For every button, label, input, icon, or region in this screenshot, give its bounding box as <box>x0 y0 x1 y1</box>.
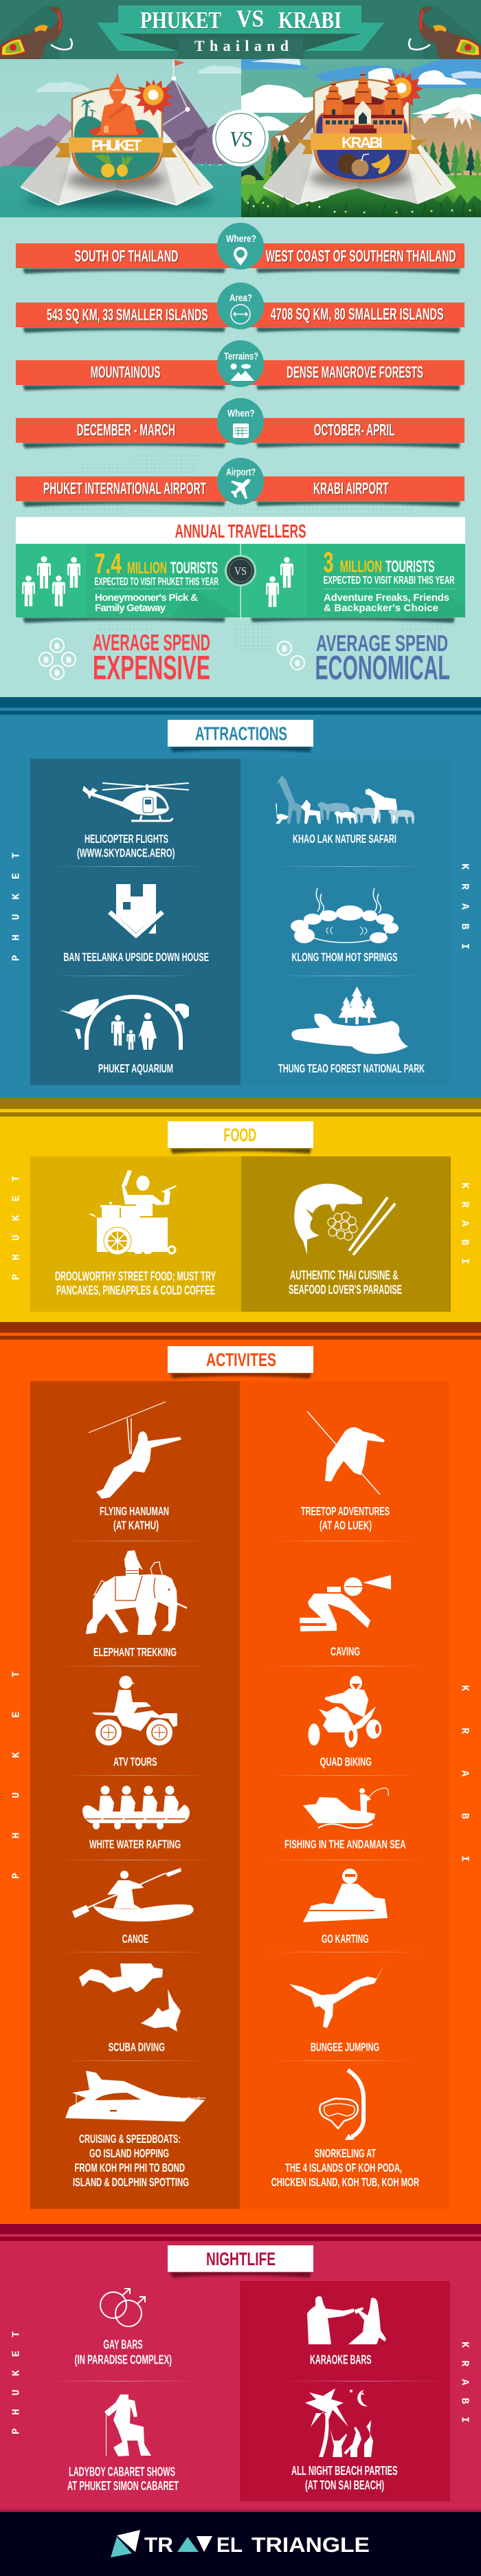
side label: Phuket: PHUKET <box>11 1671 22 1879</box>
label: seafood: SEAFOOD LOVER'S PARADISE <box>289 1282 402 1297</box>
icon: elephant trekking <box>86 1550 187 1635</box>
stat: Phuket tourists <box>94 547 219 614</box>
forest <box>241 134 481 184</box>
label: cruising: GO ISLAND HOPPING <box>89 2146 169 2160</box>
where label: Where? <box>226 233 256 245</box>
fact row: when <box>16 398 465 448</box>
side label: Krabi: KRABI <box>459 863 471 949</box>
label: cruising: CRUISING & SPEEDBOATS: <box>79 2132 181 2146</box>
icon: cabaret dancer <box>104 2395 151 2456</box>
label: Khao Lak: KHAO LAK NATURE SAFARI <box>293 832 396 846</box>
stat: Krabi tourists: MILLION <box>340 558 382 576</box>
icon: snorkel mask <box>320 2070 363 2140</box>
side label: Krabi: KRABI <box>459 1182 471 1264</box>
hero: Phuket scene <box>0 59 241 217</box>
label: beach parties <box>291 2463 398 2492</box>
heading: activities <box>168 1346 313 1378</box>
label: fishing: FISHING IN THE ANDAMAN SEA <box>284 1838 406 1851</box>
VS medallion: VS <box>230 126 252 151</box>
icon: sun <box>383 71 423 109</box>
stat: Krabi tourists <box>323 546 455 614</box>
ribbon: Phuket <box>55 137 177 157</box>
section: food <box>0 1098 481 1322</box>
label: Flying Hanuman: FLYING HANUMAN <box>100 1504 169 1518</box>
label: ladyboy cabaret: LADYBOY CABARET SHOWS <box>69 2464 175 2479</box>
label: Treetop Adventures <box>301 1504 390 1532</box>
title <box>140 5 342 34</box>
coin symbols <box>43 641 71 678</box>
fact row: where <box>16 223 465 274</box>
label: gay bars: (IN PARADISE COMPLEX) <box>74 2353 172 2366</box>
VS badge <box>225 555 256 586</box>
badge: Krabi <box>296 68 427 181</box>
Phuket area: 543 SQ KM, 33 SMALLER ISLANDS <box>47 306 208 324</box>
icon: male symbols <box>100 2289 145 2326</box>
label: helicopter flights: (WWW.SKYDANCE.AERO) <box>77 846 175 859</box>
icon: right elephant <box>409 5 481 59</box>
panel: Krabi nightlife <box>240 2281 450 2501</box>
label: Klong Thom: KLONG THOM HOT SPRINGS <box>291 950 397 964</box>
stat: Krabi tourists: & Backpacker's Choice <box>324 602 438 614</box>
label: snorkeling <box>271 2146 419 2189</box>
folded map <box>21 130 213 207</box>
icon: fishing boat <box>303 1788 388 1828</box>
icon: caving <box>300 1575 391 1631</box>
label: seafood: AUTHENTIC THAI CUISINE & <box>290 1268 399 1282</box>
stat: Phuket tourists: Family Getaway <box>95 602 166 614</box>
label: helicopter flights <box>77 832 175 859</box>
label: gay bars: GAY BARS <box>103 2337 143 2352</box>
heading: nightlife <box>168 2245 313 2278</box>
icon: forest national park <box>291 987 408 1054</box>
icon: left elephant <box>0 5 72 59</box>
ribbon: Krabi <box>296 133 427 154</box>
coin symbols: ฿ <box>295 659 300 668</box>
label: cruising: FROM KOH PHI PHI TO BOND <box>74 2161 185 2175</box>
icon: go kart <box>303 1869 388 1922</box>
label: cruising <box>73 2132 189 2189</box>
label: rafting: WHITE WATER RAFTING <box>89 1838 181 1851</box>
icon: fish and chopsticks <box>294 1184 394 1255</box>
side label: Krabi: KRABI <box>459 1685 471 1862</box>
label: karaoke bars: KARAOKE BARS <box>310 2353 372 2366</box>
heading: nightlife: NIGHTLIFE <box>206 2249 276 2269</box>
logo: Travel Triangle wordmark <box>144 2533 370 2557</box>
icon: four coins <box>39 639 76 679</box>
label: street food: DROOLWORTHY STREET FOOD; MUST TRY <box>55 1268 216 1283</box>
footer <box>0 2512 481 2576</box>
Phuket airport: PHUKET INTERNATIONAL AIRPORT <box>43 480 206 498</box>
folded map <box>262 128 456 212</box>
label: street food <box>55 1268 216 1297</box>
coin symbols: ฿ <box>54 668 60 678</box>
icon: street food cart <box>89 1170 177 1255</box>
stat: Phuket tourists: EXPECTED TO VISIT PHUKET THIS YEAR <box>95 576 219 588</box>
stat: Phuket tourists: MILLION <box>127 559 167 577</box>
icon: Phuket travellers <box>22 556 80 606</box>
icon: coconuts and bananas <box>338 153 390 176</box>
label: canoe: CANOE <box>122 1932 148 1946</box>
icon: Krabi travellers <box>266 557 293 607</box>
panel: average spend Krabi <box>278 631 450 687</box>
subtitle: Thailand <box>194 37 289 54</box>
Phuket season: DECEMBER - MARCH <box>77 421 175 440</box>
VS medallion <box>212 110 269 166</box>
panel: Phuket attractions <box>30 759 240 1085</box>
average spend label: AVERAGE SPEND <box>93 630 210 656</box>
stat: Phuket tourists: Honeymooner's Pick & <box>95 592 198 604</box>
hero: Krabi scene <box>241 59 481 217</box>
logo: Travel Triangle wordmark: TR <box>144 2533 173 2557</box>
Phuket location: SOUTH OF THAILAND <box>74 247 179 265</box>
ribbon: Phuket: PHUKET <box>91 137 142 154</box>
section: attractions <box>0 697 481 1098</box>
icon: quad biking <box>308 1676 381 1748</box>
label: snorkeling: THE 4 ISLANDS OF KOH PODA, <box>285 2161 402 2175</box>
section: nightlife <box>0 2224 481 2512</box>
icon: area circle <box>231 305 250 324</box>
label: ladyboy cabaret <box>67 2464 179 2493</box>
icon: temple <box>323 68 404 133</box>
expensive label: EXPENSIVE <box>93 650 210 687</box>
icon: pineapples <box>94 153 133 177</box>
grass foreground <box>241 188 481 217</box>
area label: Area? <box>230 292 252 304</box>
icon: helicopter <box>82 783 189 821</box>
when label: When? <box>227 408 254 419</box>
icon: palm <box>81 100 96 118</box>
label: Treetop Adventures: TREETOP ADVENTURES <box>301 1504 390 1518</box>
heading: attractions <box>168 720 313 752</box>
fact row: airport <box>16 458 465 507</box>
icon: bungee jumping <box>289 1964 385 2028</box>
side label: Phuket: PHUKET <box>11 852 22 961</box>
icon: terrain <box>230 363 254 381</box>
label: helicopter flights: HELICOPTER FLIGHTS <box>85 832 168 846</box>
heading: food: FOOD <box>223 1125 256 1145</box>
icon: plane <box>231 479 250 499</box>
icon: sun <box>134 79 174 116</box>
icon: hot springs <box>291 888 399 943</box>
icon: ATV <box>92 1676 177 1746</box>
title: PHUKET <box>140 7 221 34</box>
coin symbols: ฿ <box>43 654 49 664</box>
label: beach parties: ALL NIGHT BEACH PARTIES <box>291 2463 398 2478</box>
title banner <box>97 5 384 59</box>
icon: zipline <box>89 1402 181 1499</box>
icon: upside down house <box>108 884 164 938</box>
icon: safari animals <box>276 775 414 824</box>
side label: Phuket: PHUKET <box>11 2331 22 2434</box>
badge: Phuket <box>55 73 177 181</box>
VS badge: VS <box>234 564 247 577</box>
heading: activities: ACTIVITES <box>206 1350 276 1370</box>
stat: Krabi tourists: Adventure Freaks, Friends <box>324 592 449 604</box>
mountains <box>271 106 481 180</box>
icon: karaoke singers <box>307 2296 386 2344</box>
icon: buddha <box>88 73 146 136</box>
icon: treetop adventure <box>307 1411 385 1495</box>
ribbon: Krabi: KRABI <box>342 134 383 151</box>
ground <box>241 175 481 206</box>
coin symbols <box>282 643 300 668</box>
label: Flying Hanuman <box>100 1504 169 1532</box>
stat: Krabi tourists: TOURISTS <box>385 558 435 576</box>
side label: Phuket: PHUKET <box>11 1176 22 1280</box>
stat: Krabi tourists: 3 <box>323 546 334 578</box>
logo: triangle <box>111 2530 140 2557</box>
fact row: terrains <box>16 340 465 390</box>
label: snorkeling: SNORKELING AT <box>315 2146 376 2160</box>
Krabi airport: KRABI AIRPORT <box>313 480 389 498</box>
icon: canoe <box>72 1868 194 1922</box>
icon: location pin <box>234 247 247 265</box>
label: scuba diving: SCUBA DIVING <box>109 2040 165 2054</box>
heading: attractions: ATTRACTIONS <box>195 723 287 744</box>
icon: rafting <box>82 1786 190 1829</box>
title: KRABI <box>278 7 342 34</box>
icon: beach party <box>305 2388 373 2457</box>
label: Flying Hanuman: (AT KATHU) <box>113 1519 159 1532</box>
label: bungee jumping: BUNGEE JUMPING <box>311 2040 379 2054</box>
label: Treetop Adventures: (AT AO LUEK) <box>320 1519 372 1532</box>
panel: Krabi food <box>241 1156 451 1312</box>
heading: annual travellers: ANNUAL TRAVELLERS <box>175 520 306 542</box>
icon: scuba diving and shark <box>79 1963 181 2032</box>
panel: Phuket activities <box>30 1381 240 2209</box>
icon: aquarium <box>59 997 189 1050</box>
label: Caving: CAVING <box>331 1644 360 1658</box>
label: Elephant Trekking: ELEPHANT TREKKING <box>93 1645 177 1659</box>
label: go karting: GO KARTING <box>322 1932 369 1946</box>
terrains label: Terrains? <box>224 351 258 362</box>
panel: average spend Phuket <box>39 630 210 687</box>
header band <box>0 0 481 59</box>
mountains <box>0 59 237 167</box>
panel: Phuket food <box>30 1156 241 1312</box>
stat: Phuket tourists: 7.4 <box>95 547 122 580</box>
label: cruising: ISLAND & DOLPHIN SPOTTING <box>73 2175 189 2189</box>
coin symbols: ฿ <box>54 641 60 650</box>
coin symbols: ฿ <box>282 643 287 653</box>
panel: annual travellers <box>16 517 465 623</box>
facts background <box>0 217 481 697</box>
clouds <box>36 65 241 92</box>
airport label: Airport? <box>226 466 256 478</box>
coin symbols: ฿ <box>66 654 71 664</box>
icon: two coins <box>278 641 304 670</box>
label: street food: PANCAKES, PINEAPPLES & COLD COFFEE <box>56 1283 215 1297</box>
title: VS <box>236 5 264 32</box>
label: quad biking: QUAD BIKING <box>320 1755 372 1769</box>
label: beach parties: (AT TON SAI BEACH) <box>305 2478 384 2492</box>
heading: food <box>168 1121 313 1154</box>
label: ladyboy cabaret: AT PHUKET SIMON CABARET <box>67 2478 179 2493</box>
Phuket terrain: MOUNTAINOUS <box>91 363 161 382</box>
sky and clouds <box>241 59 481 131</box>
icon: calendar <box>233 423 249 438</box>
label: gay bars <box>74 2337 172 2366</box>
label: ATV tours: ATV TOURS <box>113 1755 157 1769</box>
fact row: area <box>16 283 465 333</box>
ground <box>0 162 241 217</box>
icon: yacht <box>65 2071 205 2122</box>
logo: Travel Triangle wordmark: EL <box>216 2533 243 2557</box>
Krabi season: OCTOBER- APRIL <box>314 421 394 440</box>
label: seafood <box>289 1268 402 1297</box>
side label: Krabi: KRABI <box>459 2342 471 2423</box>
stat: Phuket tourists: TOURISTS <box>170 559 218 577</box>
label: Phuket Aquarium: PHUKET AQUARIUM <box>98 1061 173 1075</box>
section: activities <box>0 1322 481 2224</box>
label: Ban Teelanka: BAN TEELANKA UPSIDE DOWN HOUSE <box>63 950 209 964</box>
logo: Travel Triangle wordmark: TRIANGLE <box>251 2533 370 2557</box>
